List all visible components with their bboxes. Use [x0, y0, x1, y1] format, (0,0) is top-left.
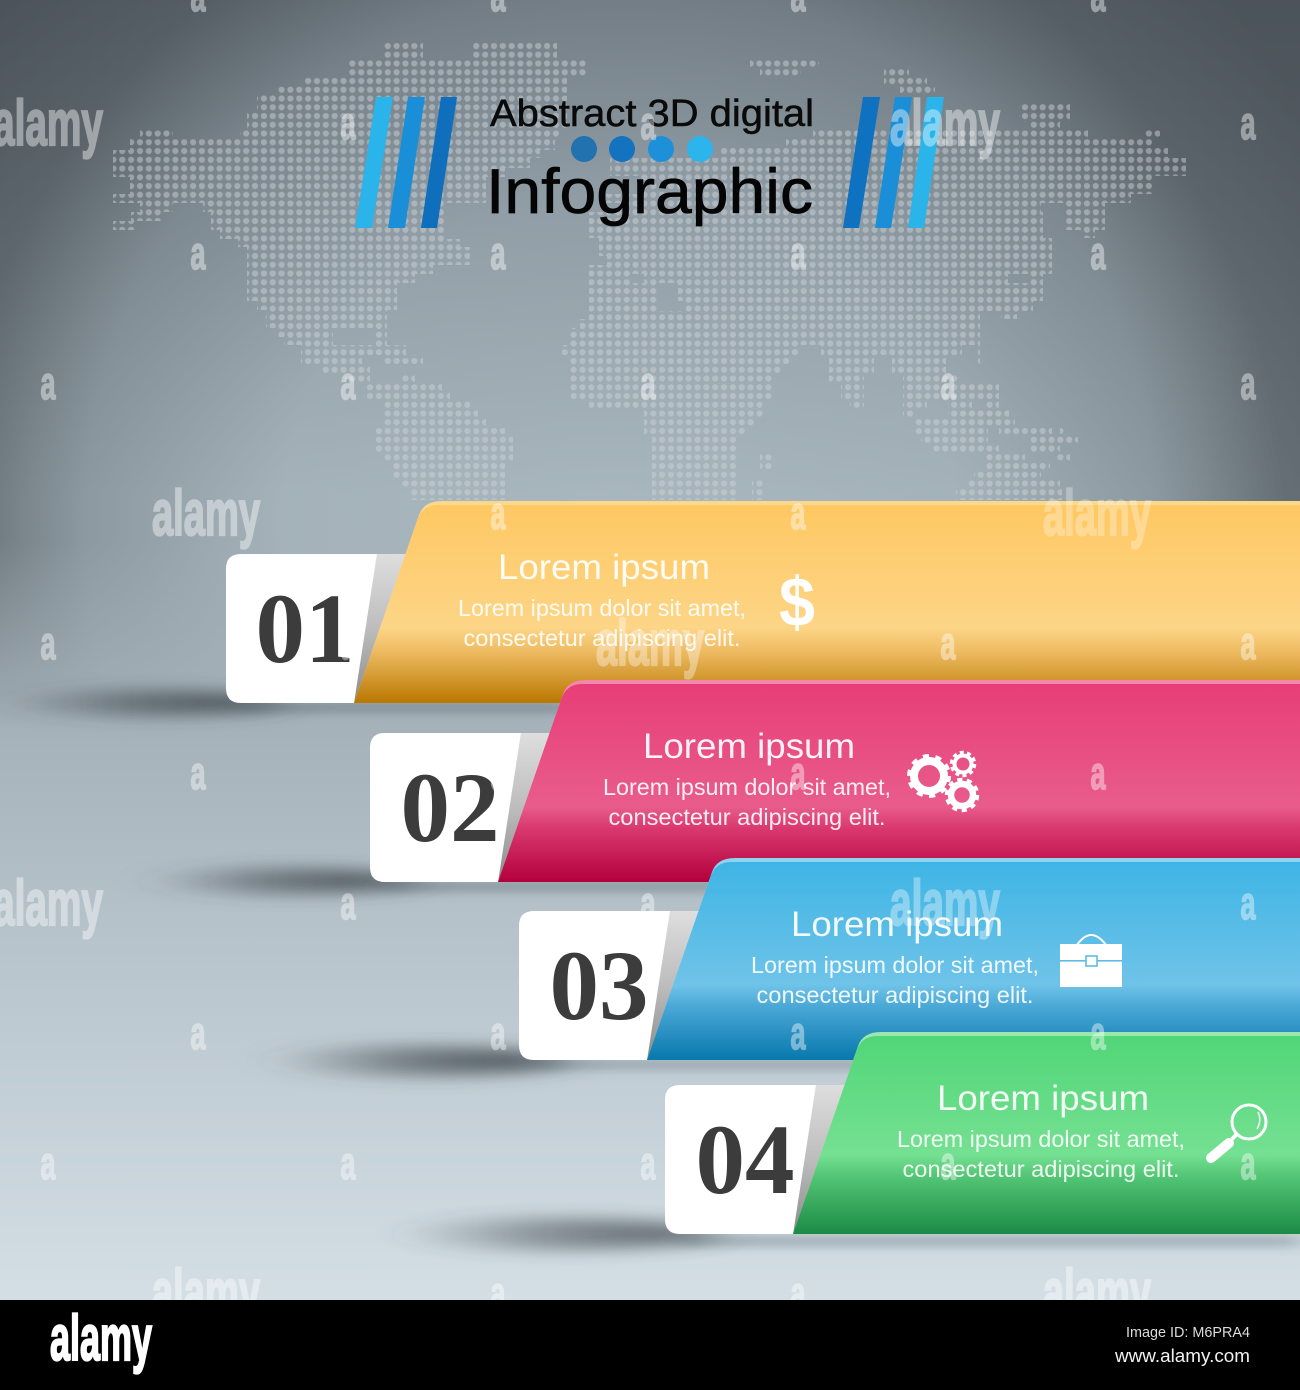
number tab 03	[519, 911, 718, 1060]
alamy watermarks: alamy	[596, 607, 704, 679]
band text: Lorem ipsum dolor sit amet,	[897, 1126, 1185, 1152]
alamy watermarks: a	[40, 357, 56, 409]
panel: step 02 pink	[370, 680, 1300, 882]
alamy watermarks: a	[790, 1007, 806, 1059]
alamy watermarks: a	[940, 617, 956, 669]
alamy watermarks: a	[940, 1137, 956, 1189]
alamy watermarks: alamy	[152, 477, 260, 549]
heading line two: Infographic	[486, 157, 813, 227]
alamy watermarks: a	[340, 1137, 356, 1189]
alamy watermarks: a	[640, 97, 656, 149]
alamy watermarks: a	[1090, 747, 1106, 799]
alamy watermarks: a	[490, 487, 506, 539]
alamy watermarks: alamy	[890, 867, 1000, 939]
image id: Image ID: M6PRA4	[1126, 1324, 1250, 1341]
alamy watermarks: alamy	[1043, 1256, 1151, 1328]
icon: gears	[910, 752, 977, 810]
left stripes icon	[355, 97, 457, 228]
footer bar	[0, 1300, 1300, 1390]
band text: consectetur adipiscing elit.	[464, 625, 740, 651]
alamy watermarks: a	[490, 227, 506, 279]
footer logo: alamy	[50, 1302, 152, 1374]
alamy watermarks: a	[790, 487, 806, 539]
band text: consectetur adipiscing elit.	[902, 1156, 1180, 1182]
four dots	[571, 136, 713, 162]
right stripes icon	[843, 97, 944, 228]
band text: consectetur adipiscing elit.	[608, 804, 886, 830]
alamy watermarks: a	[790, 747, 806, 799]
alamy watermarks: a	[1090, 227, 1106, 279]
alamy watermarks: a	[340, 97, 356, 149]
band text	[751, 905, 1039, 1008]
alamy watermarks: a	[1240, 1137, 1256, 1189]
alamy watermarks: a	[1090, 1007, 1106, 1059]
number tab 01: 01	[256, 573, 354, 684]
alamy watermarks: a	[1240, 877, 1256, 929]
band text: Lorem ipsum	[937, 1079, 1149, 1118]
heading line one: Abstract 3D digital	[490, 93, 814, 135]
band text	[603, 727, 891, 830]
icon: briefcase	[1060, 935, 1122, 987]
number tab 03: 03	[550, 930, 648, 1041]
orange band	[354, 501, 1300, 703]
green band	[793, 1032, 1300, 1234]
alamy watermarks: alamy	[1043, 477, 1151, 549]
alamy watermarks: alamy	[152, 1256, 260, 1328]
alamy watermarks: a	[340, 617, 356, 669]
alamy watermarks: alamy	[890, 87, 1000, 159]
number tab 01	[226, 554, 425, 703]
alamy watermarks: a	[190, 1007, 206, 1059]
alamy watermarks: a	[640, 1137, 656, 1189]
floor shadows	[0, 690, 1300, 1250]
alamy watermarks: a	[40, 617, 56, 669]
alamy watermarks: a	[940, 357, 956, 409]
alamy watermarks: a	[790, 1267, 806, 1319]
alamy watermarks: a	[490, 1267, 506, 1319]
band text: Lorem ipsum	[791, 905, 1003, 944]
band text: Lorem ipsum dolor sit amet,	[603, 774, 891, 800]
number tab 02	[370, 733, 569, 882]
band text	[458, 548, 746, 651]
alamy watermarks: a	[340, 357, 356, 409]
band text	[897, 1079, 1185, 1182]
website: www.alamy.com	[1114, 1346, 1250, 1366]
band text: Lorem ipsum	[643, 727, 855, 766]
alamy watermarks: a	[1240, 617, 1256, 669]
number tab 02: 02	[400, 752, 500, 863]
panel: step 04 green	[665, 1032, 1300, 1234]
icon: dollar: $	[779, 563, 815, 641]
blue band	[647, 858, 1300, 1060]
alamy watermarks: a	[190, 747, 206, 799]
alamy watermarks: a	[640, 877, 656, 929]
alamy watermarks: a	[790, 227, 806, 279]
panel: step 03 blue	[519, 858, 1300, 1060]
dotted world map	[100, 40, 1200, 502]
number tab 04: 04	[696, 1104, 794, 1215]
pink band	[498, 680, 1300, 882]
alamy watermarks: a	[40, 1137, 56, 1189]
alamy watermarks: a	[1240, 357, 1256, 409]
alamy watermarks: a	[640, 357, 656, 409]
alamy watermarks: a	[490, 1007, 506, 1059]
title block	[355, 93, 944, 228]
alamy watermarks: a	[190, 227, 206, 279]
band text: Lorem ipsum	[498, 548, 710, 587]
band text: consectetur adipiscing elit.	[756, 982, 1034, 1008]
band text: Lorem ipsum dolor sit amet,	[458, 595, 746, 621]
alamy watermarks: a	[1240, 97, 1256, 149]
number tab 04	[665, 1085, 864, 1234]
alamy watermarks: a	[340, 877, 356, 929]
panel: step 01 orange	[226, 501, 1300, 703]
alamy watermarks: a	[490, 747, 506, 799]
band text: Lorem ipsum dolor sit amet,	[751, 952, 1039, 978]
icon: magnifier	[1211, 1105, 1266, 1158]
